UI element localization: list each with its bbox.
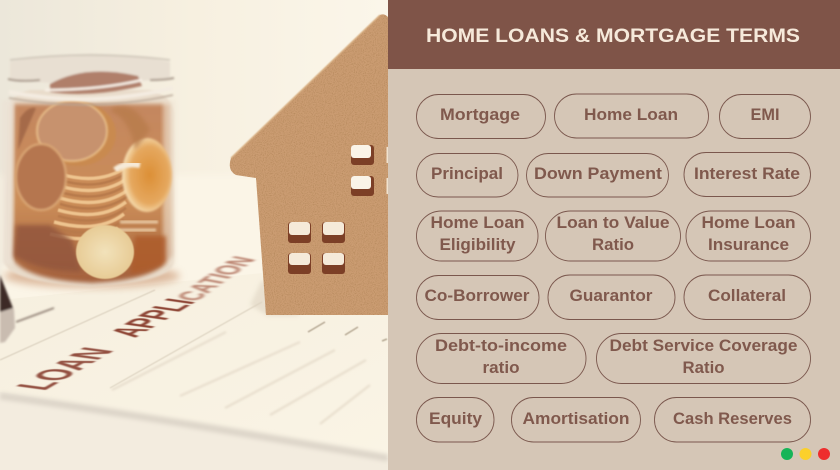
icon: wooden house model <box>230 14 388 316</box>
term: Home Loan Eligibility <box>416 211 538 261</box>
application heading text on paper: CATION <box>170 254 263 303</box>
term: Principal <box>416 154 518 197</box>
coin: front pale <box>76 225 134 279</box>
term: Amortisation <box>512 398 640 442</box>
panel: terms background <box>388 0 840 470</box>
term: Principal: Principal <box>431 164 503 183</box>
term: Home Loan Insurance: Insurance <box>708 235 789 254</box>
term: Equity <box>416 398 494 442</box>
term: EMI <box>720 94 810 138</box>
term: Loan to Value Ratio <box>546 211 680 261</box>
term: Mortgage: Mortgage <box>440 105 520 124</box>
term: Collateral: Collateral <box>708 286 786 305</box>
icon: coin jar <box>2 54 180 288</box>
term: Down Payment: Down Payment <box>534 164 662 183</box>
title: HOME LOANS & MORTGAGE TERMS <box>426 25 800 47</box>
jar neck and lid rim <box>8 54 174 105</box>
term: Cash Reserves: Cash Reserves <box>673 409 792 428</box>
coin stack <box>50 166 128 239</box>
term: Debt Service Coverage Ratio: Ratio <box>682 358 724 377</box>
term: Mortgage <box>416 94 546 138</box>
term: Home Loan: Home Loan <box>584 105 678 124</box>
term: Cash Reserves <box>654 398 810 442</box>
loan application paper <box>0 289 388 470</box>
term: Guarantor <box>548 275 675 320</box>
traffic light dots <box>781 448 830 460</box>
icon: pen <box>0 275 54 343</box>
term: Equity: Equity <box>429 409 483 428</box>
term: Interest Rate: Interest Rate <box>694 164 800 183</box>
term: Home Loan Eligibility: Eligibility <box>440 235 516 254</box>
term: Down Payment <box>526 154 668 197</box>
term: Loan to Value Ratio: Ratio <box>592 235 634 254</box>
term: EMI: EMI <box>750 105 780 124</box>
header band <box>388 0 840 69</box>
term: Interest Rate <box>684 152 810 196</box>
application heading text on paper: APPLI <box>99 296 205 339</box>
panel: photo of coin jar, wooden house and loan application <box>0 0 388 470</box>
application heading text on paper <box>6 254 263 392</box>
term: Debt-to-income ratio <box>416 334 586 384</box>
term: Guarantor: Guarantor <box>570 286 653 305</box>
coins <box>66 102 116 165</box>
term: Home Loan Insurance: Home Loan <box>702 213 796 232</box>
application heading text on paper: LOAN <box>6 345 124 392</box>
term: Collateral <box>684 275 810 320</box>
term: Co-Borrower: Co-Borrower <box>424 286 530 305</box>
term: Debt Service Coverage Ratio: Debt Service Coverage <box>610 336 798 355</box>
term: Loan to Value Ratio: Loan to Value <box>556 213 670 232</box>
term: Home Loan Eligibility: Home Loan <box>430 213 524 232</box>
term: Debt Service Coverage Ratio <box>596 334 810 384</box>
term: Co-Borrower <box>416 276 539 320</box>
house windows <box>288 145 388 274</box>
term: Amortisation: Amortisation <box>522 409 630 428</box>
term: Home Loan <box>554 94 708 138</box>
term: Home Loan Insurance <box>686 211 810 261</box>
term: Debt-to-income ratio: Debt-to-income <box>435 336 567 355</box>
term: Debt-to-income ratio: ratio <box>482 358 520 377</box>
